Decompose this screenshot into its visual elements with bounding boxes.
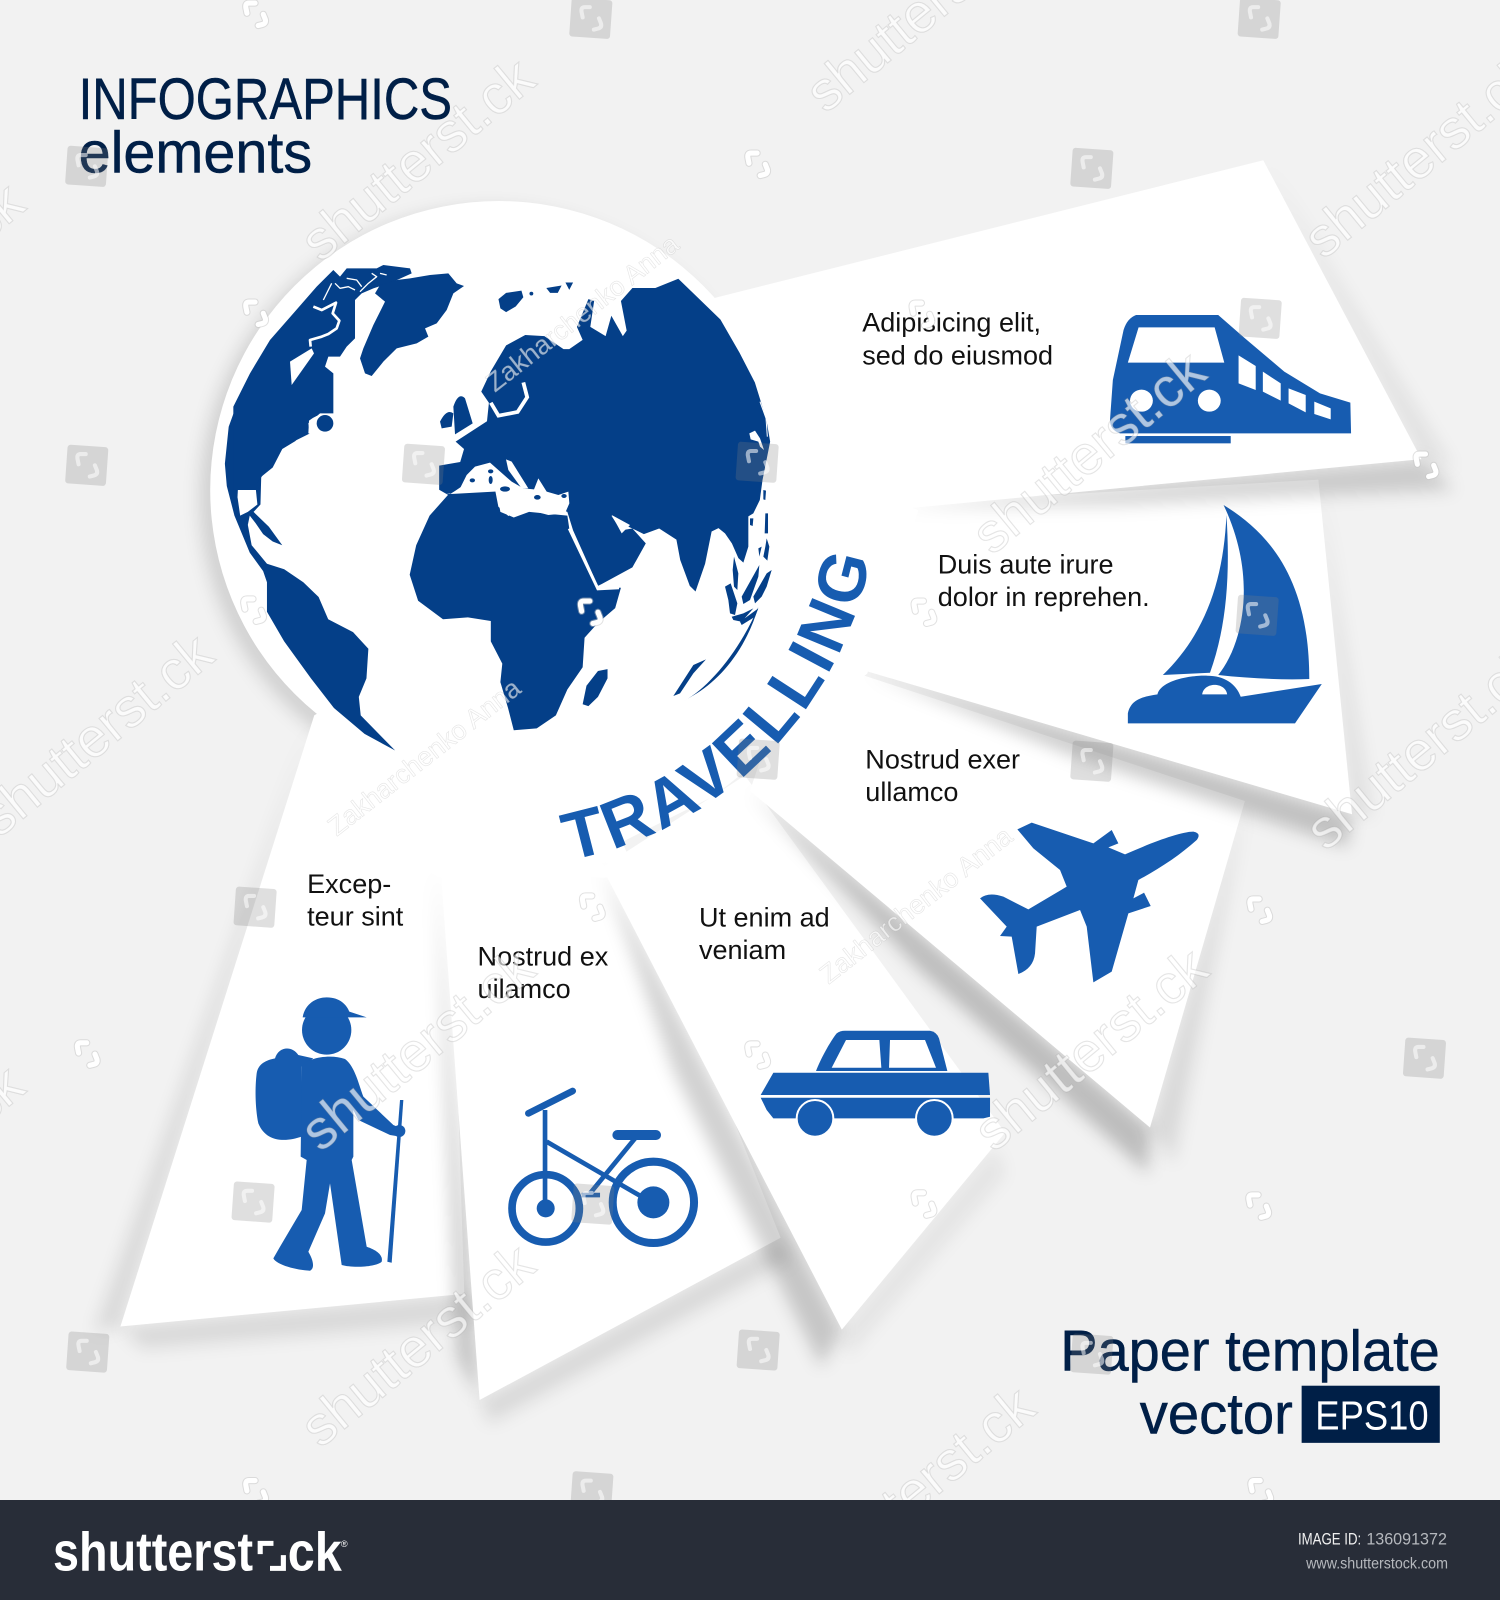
watermark text: shutterst.ck [289,45,546,273]
text: sailboat caption: dolor in reprehen. [938,582,1150,612]
image id: IMAGE ID: [1298,1529,1361,1548]
icon: train [1110,315,1351,443]
heading: travelling curved: TRAVELLING [558,554,866,857]
logo: shutterstock wordmark: ck [288,1520,342,1582]
globe disc shadow [199,207,781,789]
icon: plane [980,823,1199,982]
watermark text: Zakharchenko Anna [322,672,526,841]
icon: car [761,1031,990,1137]
panel: car [602,776,1005,1367]
text: sailboat caption: Duis aute irure [938,549,1114,579]
website url: www.shutterstock.com [1305,1555,1448,1572]
text: hiker caption: Excep- [307,869,391,899]
logo: shutterstock wordmark: shutterst [53,1520,253,1582]
watermark text: shutterst.ck [289,935,546,1162]
text: car caption: veniam [699,935,786,965]
map: East Asia islands [673,402,772,701]
watermark text: shutterst.ck [789,1374,1046,1600]
map: Americas south and Eurasia, Africa [225,279,770,751]
image id [1298,1529,1447,1548]
text: train caption: sed do eiusmod [862,340,1053,370]
globe [210,201,918,878]
map: North America and Greenland [233,265,473,490]
watermark text: Zakharchenko Anna [814,820,1018,989]
text: car caption: Ut enim ad [699,903,830,933]
text: bicycle caption: Nostrud ex [478,941,609,971]
title [79,67,452,185]
watermark text: shutterst.ck [289,1231,546,1458]
watermark text: shutterst.ck [960,338,1217,565]
text: train caption: Adipisicing elit, [862,308,1041,338]
icon: sailboat [1128,505,1322,723]
panel: sailboat [776,480,1372,847]
panel: hiker [94,653,480,1349]
footer bar [0,1500,1500,1600]
icon: bicycle [512,1091,694,1243]
map: Gulf of California [238,479,257,516]
text: plane caption: ullamco [865,777,958,807]
footer text: paper template: Paper template [1060,1319,1440,1383]
panel: plane [750,653,1245,1173]
badge: EPS10: EPS10 [1315,1393,1429,1439]
footer text: paper template [1060,1319,1440,1447]
panel: train [714,160,1454,510]
icon: hiker [256,997,405,1271]
panel: bicycle [437,816,791,1423]
watermark text: shutterst.ck [962,935,1219,1162]
footer text: paper template: vector [1140,1383,1293,1447]
title: elements [79,120,312,185]
title: INFOGRAPHICS [79,67,452,132]
text: hiker caption: teur sint [307,902,404,932]
watermark text: Zakharchenko Anna [480,229,685,398]
map: Mediterranean [446,459,630,533]
image id: 136091372 [1366,1529,1447,1548]
logo: shutterstock wordmark: ® [341,1539,348,1549]
text: plane caption: Nostrud exer [865,744,1020,774]
text: bicycle caption: uilamco [478,974,571,1004]
